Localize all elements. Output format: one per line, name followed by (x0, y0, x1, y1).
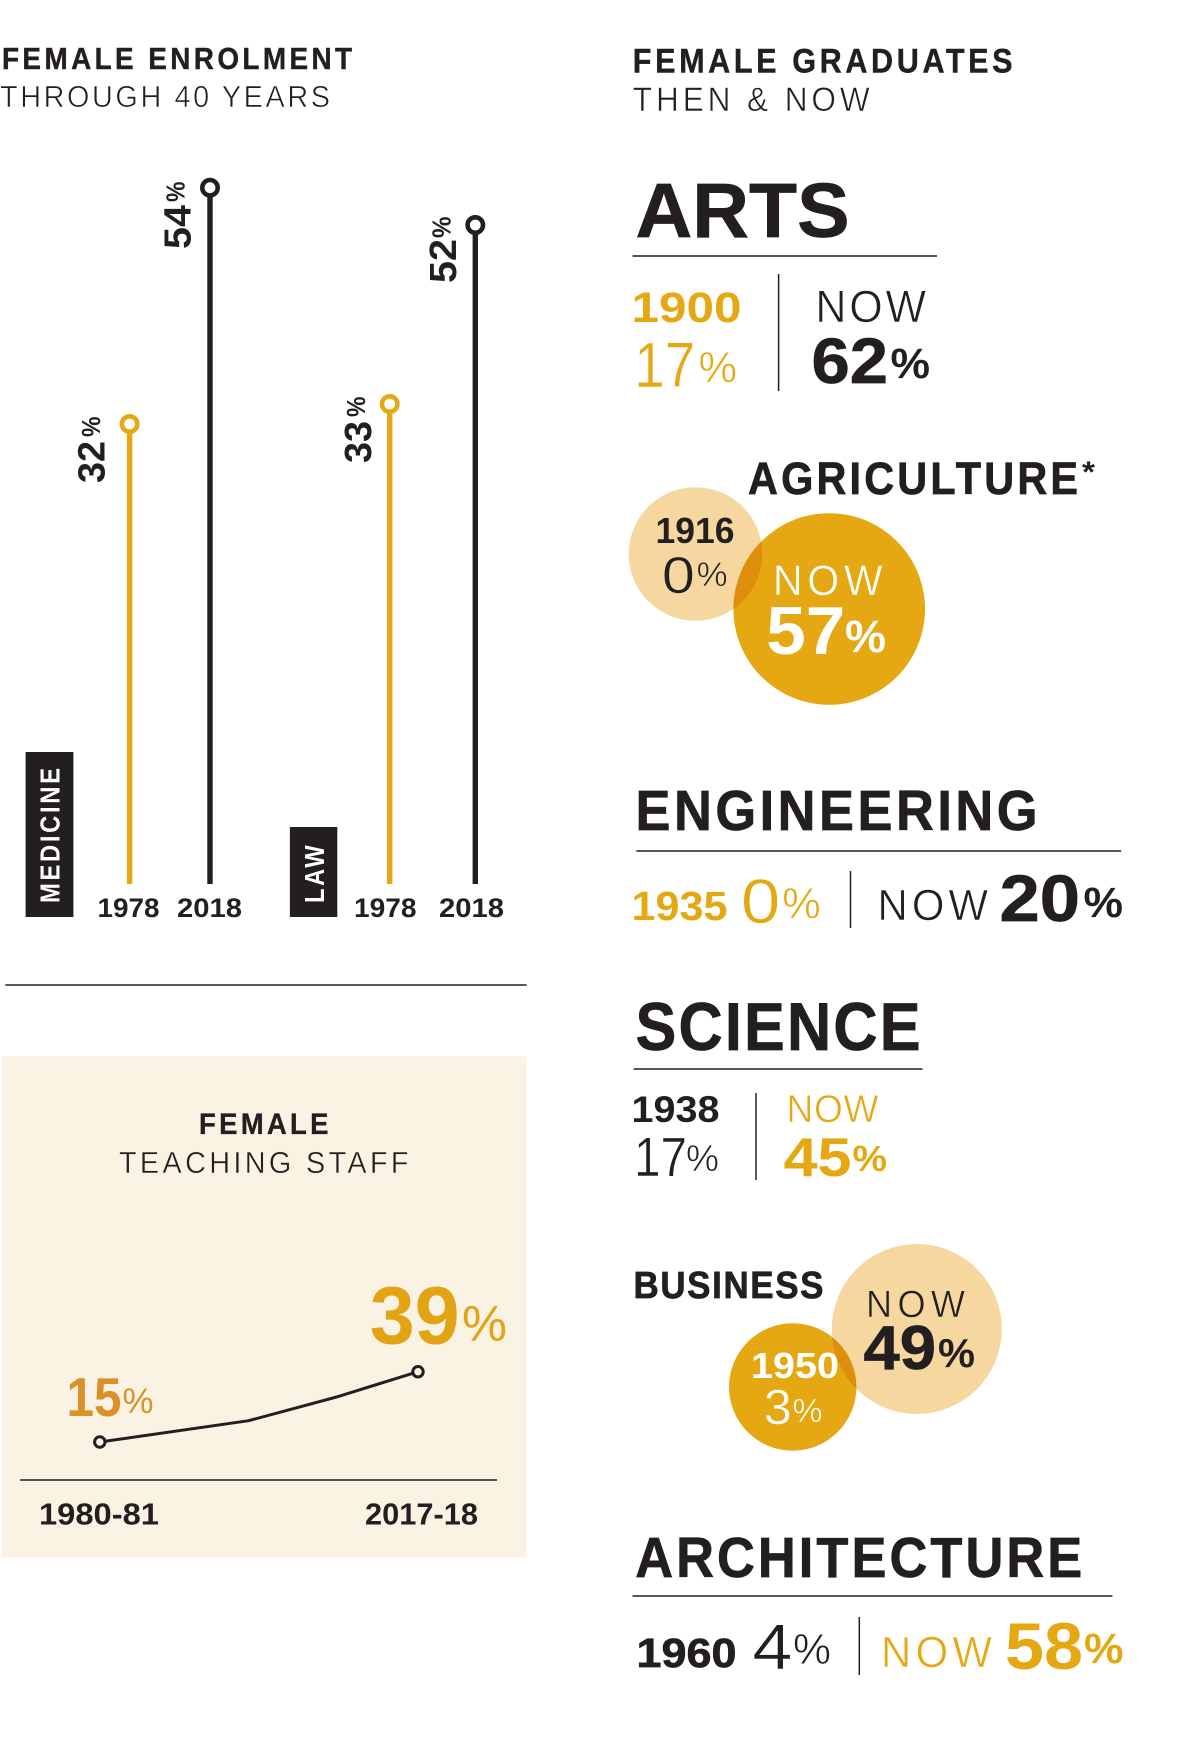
bar: law 1978, 33%: % (341, 396, 371, 417)
section: science: SCIENCE (636, 988, 921, 1065)
section: business: % (938, 1330, 975, 1376)
bar: law 2018, 52%: 2018 (439, 893, 504, 923)
heading: female graduates: THEN & NOW (633, 80, 870, 118)
section: agriculture: NOW (773, 556, 883, 604)
label: medicine: MEDICINE (33, 768, 66, 903)
axis labels (39, 1496, 478, 1532)
value: 15%: 15 (66, 1366, 122, 1428)
section: engineering: 20 (1000, 861, 1080, 935)
bar: law 1978, 33%: 1978 (354, 893, 416, 923)
bar: medicine 1978, 32%: % (76, 416, 106, 437)
circle: now 57% (733, 513, 925, 705)
section: agriculture: 0 (662, 547, 695, 605)
bar: medicine 2018, 54%: 2018 (177, 893, 242, 923)
circle: 1950 3% (729, 1323, 856, 1451)
section: architecture: % (793, 1626, 831, 1674)
section: architecture: 58 (1005, 1609, 1083, 1683)
section: engineering: ENGINEERING (636, 778, 1038, 842)
section: agriculture: 1916 (656, 510, 734, 551)
panel: female teaching staff (2, 1056, 527, 1557)
bar: law 2018, 52% (423, 216, 504, 923)
section: arts: % (890, 340, 930, 388)
section: engineering: % (782, 879, 821, 928)
section: science: 45 (784, 1126, 852, 1188)
section: business (634, 1244, 1002, 1451)
section: business: 3 (764, 1381, 792, 1435)
panel: female graduates then and now (629, 42, 1124, 1683)
value: 39%: 39 (370, 1270, 460, 1361)
section: architecture (632, 1525, 1124, 1683)
bar: medicine 2018, 54%: % (161, 182, 191, 202)
section: business: BUSINESS (634, 1264, 823, 1306)
heading: female teaching staff: FEMALE (199, 1108, 329, 1141)
lollipop chart: medicine (26, 180, 242, 923)
section: arts: 62 (812, 325, 888, 397)
section: engineering: 0 (741, 867, 780, 937)
section: architecture: ARCHITECTURE (635, 1525, 1082, 1589)
bar: law 1978, 33%: 33 (338, 421, 380, 463)
section: arts: % (698, 343, 737, 392)
section: architecture: 1960 (636, 1630, 736, 1676)
label: medicine (26, 752, 73, 917)
bar: medicine 2018, 54%: 54 (157, 205, 199, 249)
circle: now 49% (832, 1244, 1002, 1414)
section: agriculture: % (697, 556, 728, 594)
bar: law 2018, 52%: 52 (423, 239, 465, 283)
label: law (290, 827, 337, 917)
section: architecture: NOW (881, 1628, 992, 1677)
heading: female enrolment (0, 42, 352, 114)
section: architecture: 4 (752, 1611, 792, 1683)
axis labels: 1980-81 (39, 1496, 159, 1532)
section: agriculture: % (845, 611, 886, 662)
section: agriculture: 57 (766, 593, 845, 669)
section: science: NOW (786, 1088, 879, 1131)
heading: female teaching staff (119, 1108, 409, 1180)
value: 39% (370, 1270, 507, 1361)
lollipop chart: law (290, 216, 504, 923)
section: science: % (686, 1138, 719, 1179)
section: business: % (792, 1392, 822, 1429)
bar: law 1978, 33% (338, 396, 416, 923)
axis labels: 2017-18 (365, 1496, 478, 1532)
heading: female enrolment: THROUGH 40 YEARS (0, 80, 330, 114)
heading: female graduates (633, 42, 1013, 118)
section: agriculture: AGRICULTURE (748, 454, 1078, 504)
section: arts: 1900 (632, 284, 742, 332)
heading: female teaching staff: TEACHING STAFF (119, 1146, 409, 1180)
line chart: teaching staff trend (95, 1366, 423, 1447)
section: business: 49 (864, 1314, 936, 1383)
section: agriculture (629, 454, 1095, 705)
bar: medicine 2018, 54% (157, 180, 242, 923)
section: arts: NOW (816, 282, 927, 332)
section: engineering (632, 778, 1123, 937)
section: science: 17 (634, 1125, 687, 1188)
section: business: NOW (866, 1282, 965, 1325)
section: engineering: % (1084, 879, 1123, 927)
section: arts (632, 168, 937, 401)
circle: 1916 0% (629, 487, 762, 621)
section: agriculture: * (1082, 456, 1095, 489)
section: engineering: NOW (878, 881, 988, 930)
label: law: LAW (298, 845, 330, 903)
bar: law 2018, 52%: % (426, 216, 456, 238)
value: 15%: % (122, 1382, 154, 1421)
value: 39%: % (462, 1296, 507, 1352)
heading: female graduates: FEMALE GRADUATES (633, 42, 1013, 80)
section: business: 1950 (751, 1345, 839, 1386)
section: engineering: 1935 (632, 883, 728, 929)
section: science (632, 988, 922, 1188)
section: architecture: % (1084, 1625, 1124, 1673)
section: science: % (852, 1138, 887, 1179)
panel: female enrolment through 40 years (0, 42, 527, 985)
bar: medicine 1978, 32%: 32 (71, 441, 113, 483)
bar: medicine 1978, 32% (71, 416, 160, 923)
section: science: 1938 (632, 1089, 720, 1130)
section: arts: ARTS (636, 168, 850, 254)
bar: medicine 1978, 32%: 1978 (98, 893, 160, 923)
section: arts: 17 (634, 329, 695, 401)
heading: female enrolment: FEMALE ENROLMENT (2, 42, 352, 76)
